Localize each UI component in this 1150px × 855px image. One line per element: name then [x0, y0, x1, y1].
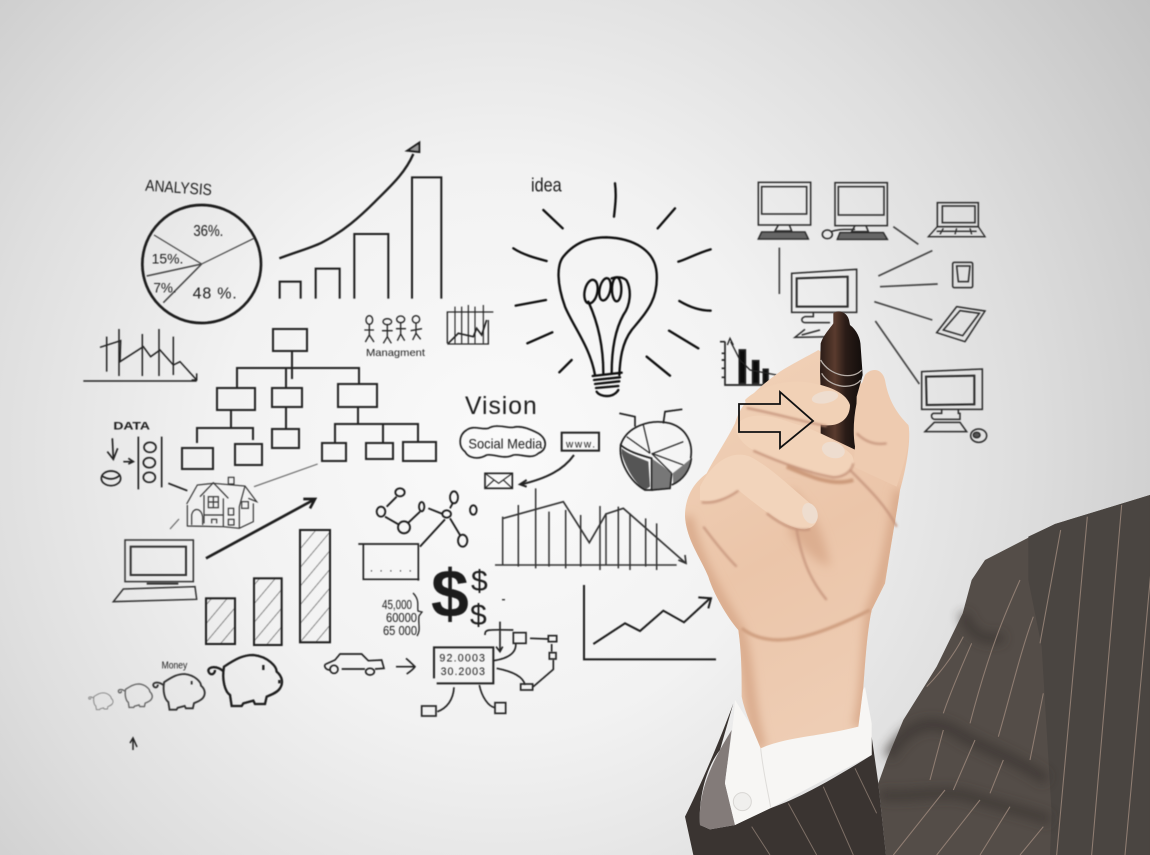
flow diagram: 30.2003	[441, 666, 485, 678]
pie chart: analysis	[142, 178, 261, 323]
piggy banks: money	[89, 655, 282, 710]
sleeve lining	[700, 730, 735, 829]
rising bar chart with arrow	[279, 143, 441, 299]
right suit panel	[1028, 495, 1150, 855]
hand edge shading	[687, 487, 900, 748]
dollar signs and numbers: $	[470, 599, 487, 632]
hand	[685, 312, 909, 748]
finger nails	[799, 389, 847, 526]
arrow outline	[739, 392, 813, 448]
pie chart: analysis: 36%.	[193, 223, 223, 240]
management figures	[364, 316, 425, 359]
hatched bars with arrow	[206, 499, 330, 645]
thumb	[853, 370, 909, 487]
piggy banks: money: Money	[162, 660, 187, 671]
dollar signs and numbers: 45,000	[382, 597, 412, 612]
vision social media: Social Media	[468, 435, 543, 451]
sketches	[83, 143, 987, 750]
pie chart: analysis: ANALYSIS	[145, 178, 212, 199]
pie chart: analysis: 48 %.	[193, 285, 237, 302]
pinstripes	[893, 505, 1150, 855]
marker pen	[820, 312, 863, 450]
light bulb: idea	[513, 176, 711, 396]
vision social media: www.	[565, 439, 595, 450]
house	[170, 464, 318, 529]
line chart small	[83, 329, 197, 381]
3D pie chart	[619, 409, 691, 490]
computer network	[758, 182, 987, 442]
businessman suit body	[878, 495, 1150, 855]
pie chart: analysis: 15%.	[152, 250, 183, 266]
car	[325, 654, 415, 675]
vision social media: Vision	[465, 393, 537, 420]
dollar signs and numbers: $	[431, 556, 469, 632]
cuff button	[733, 793, 751, 811]
jacket sleeve	[685, 687, 886, 855]
palm	[685, 350, 909, 748]
dollar signs and numbers	[382, 556, 505, 638]
light bulb: idea: idea	[531, 176, 562, 197]
small up arrow	[130, 738, 137, 750]
ring finger	[700, 455, 817, 529]
large line bar chart	[495, 488, 686, 570]
molecule network	[377, 488, 477, 547]
small screen	[358, 544, 419, 581]
middle finger	[735, 416, 854, 476]
flow diagram	[422, 622, 557, 716]
flow diagram: 92.0003	[439, 653, 485, 665]
shirt cuff	[725, 687, 872, 825]
small framed chart	[447, 305, 493, 344]
data icon	[101, 420, 187, 491]
hand creases	[702, 408, 897, 640]
suit folds	[880, 613, 1050, 820]
vision social media	[460, 393, 599, 488]
laptop	[113, 540, 197, 602]
dollar signs and numbers: 60000	[386, 610, 417, 625]
pie chart: analysis: 7%.	[153, 280, 177, 296]
sleeve stripes	[752, 768, 877, 855]
dollar signs and numbers: 65 000	[383, 623, 417, 638]
dollar signs and numbers: $	[471, 565, 488, 598]
small screen: . . . . .	[370, 563, 412, 575]
index finger	[745, 382, 850, 425]
line chart with arrow	[584, 585, 716, 659]
data icon: DATA	[113, 420, 150, 432]
management figures: Managment	[366, 348, 425, 359]
organisation chart	[182, 329, 436, 469]
falling bar chart	[720, 338, 777, 385]
